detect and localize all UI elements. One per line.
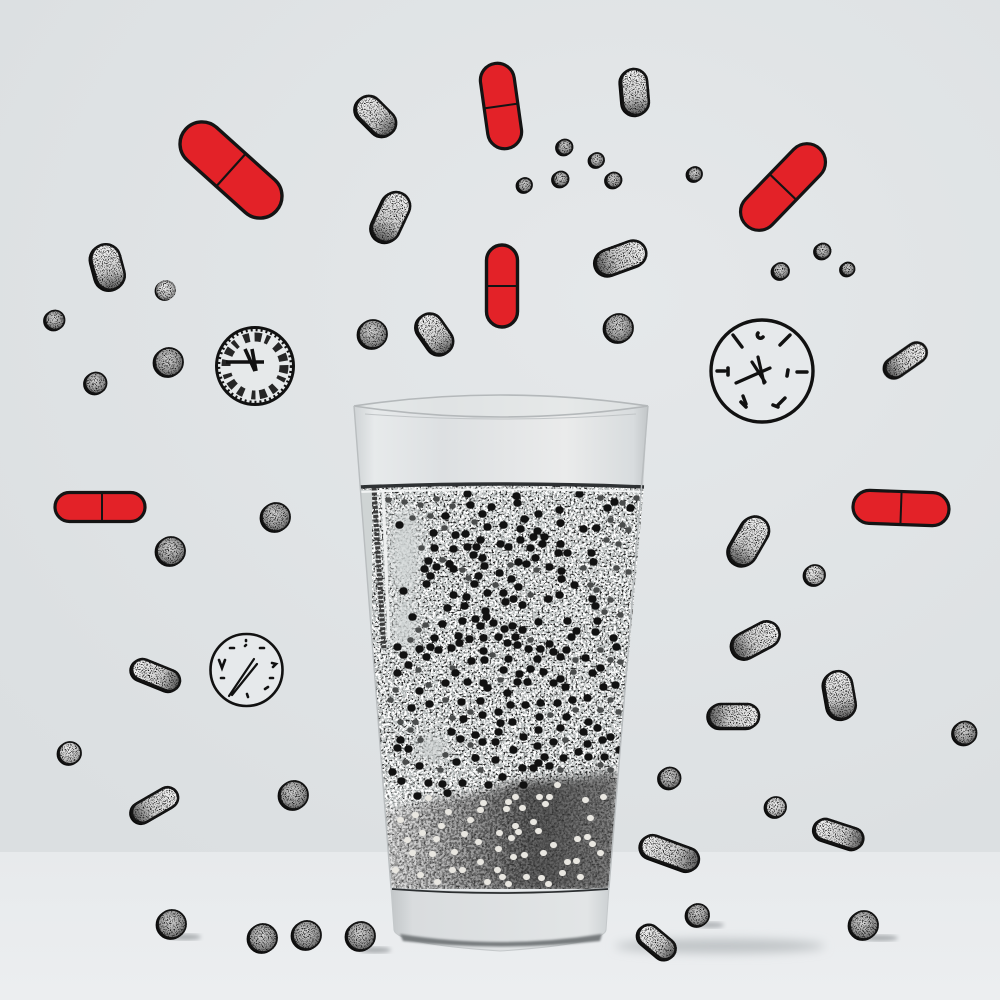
grey capsule 2 (620, 68, 650, 116)
red capsule 6 (852, 490, 950, 526)
white grains in the sediment (395, 785, 604, 884)
grey seed clusters (388, 498, 637, 770)
clock marks (219, 640, 276, 697)
tablet right cluster (773, 244, 854, 279)
grey capsule 8 (724, 511, 774, 571)
tablets beside the glass top (359, 314, 633, 348)
red capsule 5 (55, 492, 145, 522)
grey capsule 4 (88, 241, 128, 293)
grey capsule 14 (812, 816, 866, 852)
clock hands (736, 357, 770, 383)
clock hands (229, 659, 257, 696)
red capsule 1 (171, 113, 291, 227)
grey capsule 1 (351, 91, 401, 141)
glass of water (354, 395, 650, 951)
clock: small, lower left (210, 634, 282, 706)
grey capsule 5 (592, 237, 650, 279)
red capsules (55, 61, 950, 526)
grey capsule 10 (822, 669, 858, 721)
grey capsule 15 (638, 832, 702, 874)
tablets mid right (660, 565, 976, 817)
glass base (391, 888, 609, 951)
tablets mid left (59, 503, 308, 809)
clock: dense numerals, upper left (216, 328, 294, 404)
glass side walls (354, 406, 648, 888)
water body (355, 485, 650, 895)
clock face marks (226, 337, 284, 395)
grey capsule 9 (728, 617, 784, 663)
red capsule 3 (733, 136, 833, 238)
tablets on the table right (687, 904, 878, 939)
tablets left column (46, 281, 183, 394)
grey round tablets (46, 140, 976, 952)
clock: large, upper right (711, 320, 813, 422)
clock hands (226, 349, 264, 371)
grey capsule 11 (709, 704, 759, 728)
black seeds in the water (392, 494, 631, 796)
clock numerals (728, 333, 788, 407)
glass upper empty section (354, 396, 648, 488)
grey capsule 6 (412, 309, 458, 359)
base top line (392, 889, 608, 893)
grey capsule 3 (367, 188, 415, 246)
tablets on the table left (158, 910, 375, 952)
clock ticks (717, 335, 807, 405)
water surface line (360, 484, 644, 487)
glass inner line (365, 414, 636, 419)
red capsule 2 (478, 61, 524, 151)
grey capsules (88, 68, 931, 964)
tablet top cluster (518, 140, 702, 192)
sediment at the bottom (380, 770, 620, 895)
table surface (0, 852, 1000, 1000)
base dark refraction band (400, 934, 602, 946)
grey capsule 12 (129, 656, 183, 694)
shadows on the table (169, 922, 898, 953)
water surface highlight (360, 490, 644, 492)
grey capsule 16 (634, 920, 680, 964)
clock rim ticks (219, 330, 291, 402)
grey capsule 7 (881, 339, 931, 381)
red capsule 4 (486, 245, 518, 327)
glass rim (354, 395, 648, 417)
grey capsule 13 (128, 783, 182, 827)
